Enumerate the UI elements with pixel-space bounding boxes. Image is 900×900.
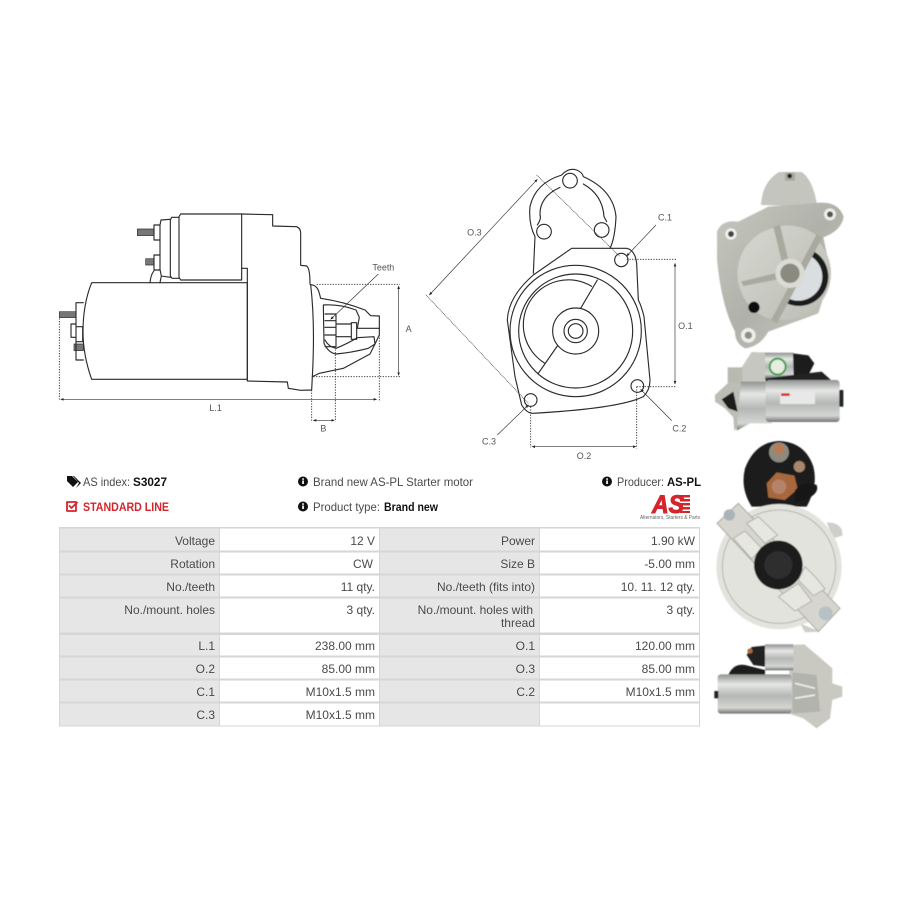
- table text: M10x1.5 mm: [306, 685, 375, 699]
- table text: 1.90 kW: [651, 534, 696, 548]
- drive housing: [242, 214, 313, 390]
- side view technical drawing: A: [406, 324, 412, 334]
- table text: C.2: [516, 685, 535, 699]
- table text: No./teeth (fits into): [437, 580, 535, 594]
- product type: [298, 500, 439, 514]
- producer: [602, 475, 701, 489]
- front view technical drawing: C.1: [658, 213, 672, 223]
- product type: Brand new: [384, 500, 439, 514]
- table text: CW: [353, 557, 374, 571]
- product info: AS index: S3027: [133, 475, 167, 489]
- table text: Rotation: [170, 557, 215, 571]
- dimension labels: O.3: [467, 227, 482, 237]
- table cell backgrounds: [60, 528, 699, 726]
- photo: starter front flange: [717, 172, 844, 348]
- front view technical drawing: C.2: [672, 424, 686, 434]
- table text: O.1: [516, 639, 535, 653]
- table text: [124, 534, 696, 722]
- AS logo: [640, 491, 700, 521]
- table text: L.1: [198, 639, 215, 653]
- front view technical drawing: C.3: [482, 437, 496, 447]
- producer: AS-PL: [667, 475, 701, 489]
- product info: AS index: [67, 475, 167, 489]
- table text: -5.00 mm: [644, 557, 695, 571]
- motor body: [83, 283, 247, 379]
- photo: starter rear view: [716, 441, 842, 632]
- table text: O.3: [516, 662, 535, 676]
- icon: checked box: [67, 502, 78, 511]
- dimension labels: Teeth: [372, 263, 394, 273]
- table text: thread: [501, 616, 535, 630]
- AS logo: Alternators, Starters & Parts: [640, 515, 700, 521]
- product description: Brand new AS-PL Starter motor: [313, 475, 473, 489]
- table text: 11 qty.: [341, 580, 375, 594]
- table text: C.3: [196, 708, 215, 722]
- AS logo: AS: [651, 491, 684, 519]
- mounting holes: [524, 173, 644, 406]
- table text: 120.00 mm: [635, 639, 695, 653]
- photo: starter opposite side view: [714, 644, 842, 728]
- icon: info: [602, 476, 612, 486]
- solenoid: [150, 214, 242, 283]
- icon: info: [298, 502, 308, 512]
- table text: No./teeth: [166, 580, 215, 594]
- table text: Size B: [500, 557, 535, 571]
- table text: 3 qty.: [667, 603, 695, 617]
- concentric rings: [510, 265, 641, 397]
- side view technical drawing: [59, 214, 412, 433]
- terminal studs: [59, 229, 154, 351]
- product line badge: STANDARD LINE: [83, 500, 169, 514]
- table text: M10x1.5 mm: [306, 708, 375, 722]
- table text: O.2: [196, 662, 215, 676]
- pinion nose: [311, 285, 379, 377]
- specification table: [59, 527, 700, 726]
- front view technical drawing: O.1: [678, 321, 693, 331]
- table text: 85.00 mm: [642, 662, 695, 676]
- side view technical drawing: L.1: [209, 403, 222, 413]
- upper lug: [530, 169, 616, 273]
- table text: Voltage: [175, 534, 215, 548]
- flange outline: [507, 248, 650, 413]
- table text: M10x1.5 mm: [626, 685, 695, 699]
- table text: C.1: [196, 685, 215, 699]
- table text: 10. 11. 12 qty.: [621, 580, 695, 594]
- table text: Power: [501, 534, 535, 548]
- icon: tags: [67, 476, 81, 488]
- dimension lines: [59, 284, 400, 422]
- front view technical drawing: [426, 169, 693, 461]
- photo: starter side view with label: [715, 352, 843, 431]
- table text: No./mount. holes: [124, 603, 215, 617]
- table text: 3 qty.: [347, 603, 375, 617]
- dimension lines: [426, 175, 620, 403]
- producer: Producer:: [617, 475, 664, 489]
- table text: No./mount. holes with: [418, 603, 533, 617]
- product info: AS index: AS index:: [83, 475, 130, 489]
- icon: info: [298, 476, 308, 486]
- table text: 12 V: [350, 534, 375, 548]
- front view technical drawing: O.2: [577, 451, 591, 461]
- product type: Product type:: [313, 500, 380, 514]
- table text: 238.00 mm: [315, 639, 375, 653]
- pinion teeth: [325, 314, 357, 347]
- side view technical drawing: B: [320, 423, 326, 433]
- table text: 85.00 mm: [322, 662, 375, 676]
